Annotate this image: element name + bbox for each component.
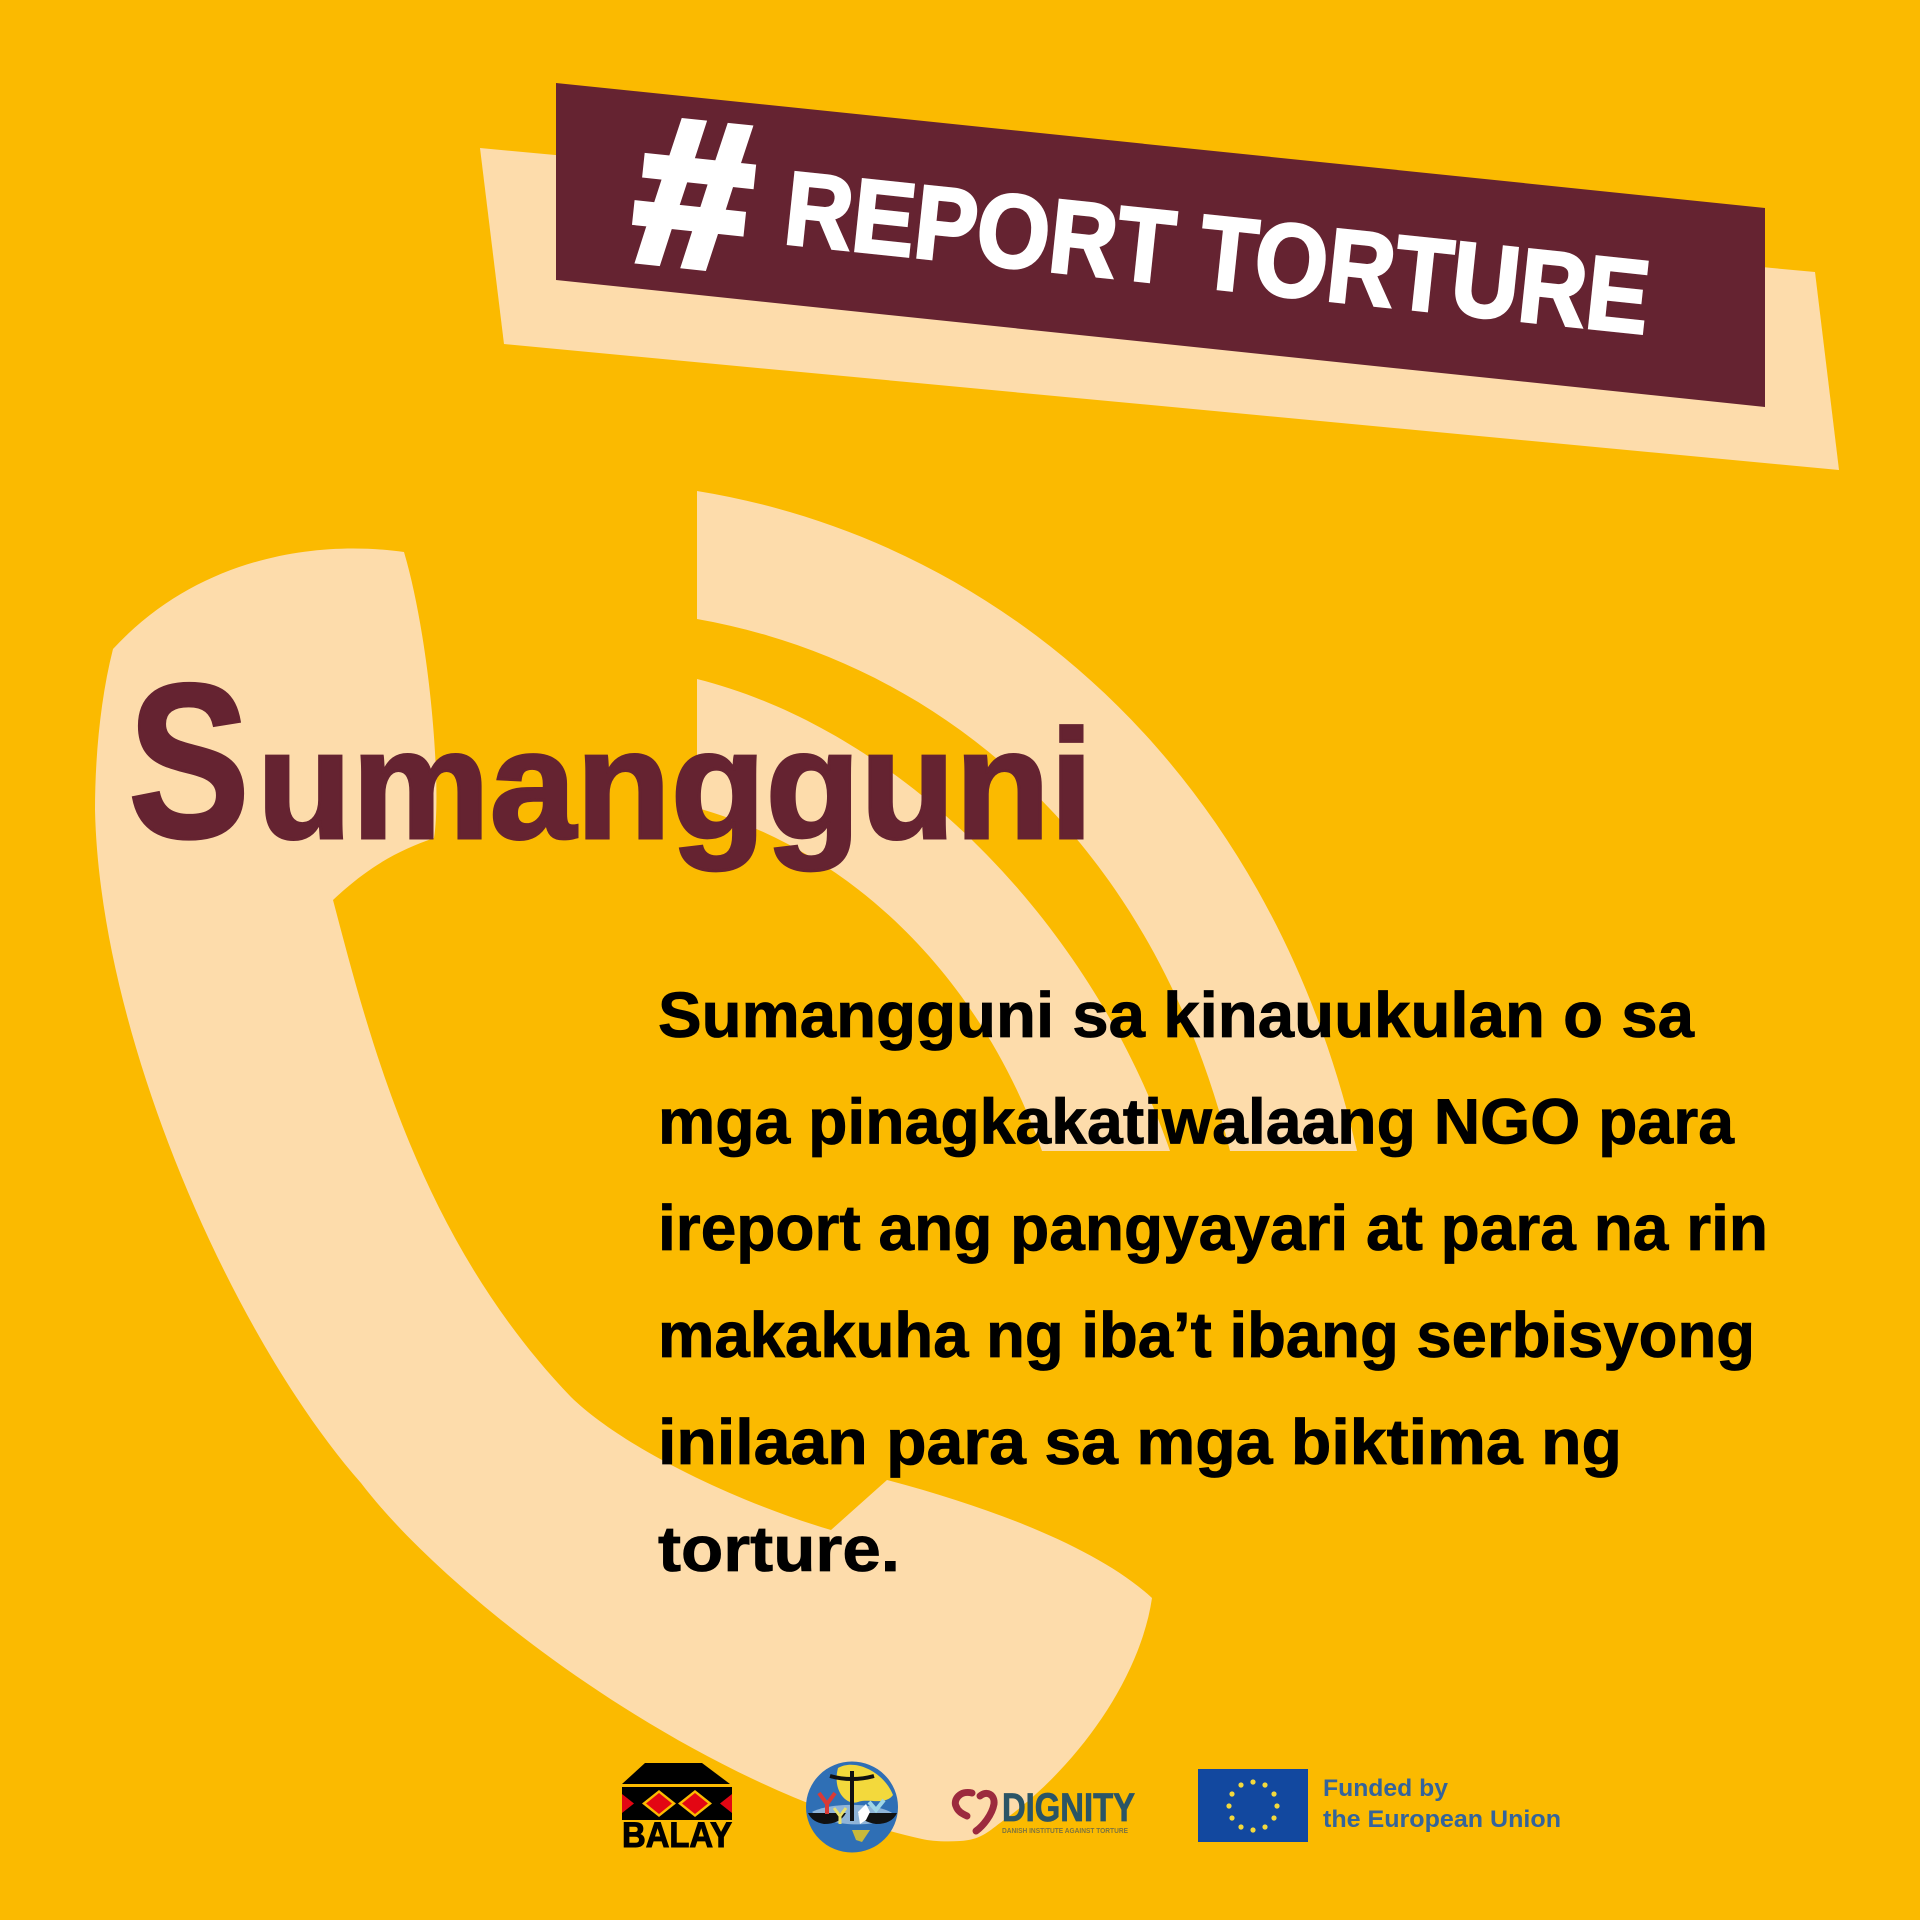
logo: Dignity	[955, 1786, 1135, 1835]
body text: Sumangguni sa kinauukulan o sa	[658, 979, 1694, 1051]
logo: Dignity: DANISH INSTITUTE AGAINST TORTURE	[1002, 1828, 1128, 1835]
hash symbol: #	[625, 74, 763, 314]
heading: S	[128, 638, 250, 884]
logo: EU flag	[1198, 1769, 1308, 1842]
heading: umangguni	[257, 698, 1093, 871]
icon: telephone handset	[95, 548, 1152, 1841]
body text: torture.	[658, 1513, 900, 1585]
logo: Balay: BALAY	[622, 1816, 732, 1855]
logo: Dignity: DIGNITY	[1002, 1786, 1135, 1830]
logo: globe with scales	[806, 1762, 898, 1852]
body text	[658, 979, 1768, 1585]
funding text: Funded by	[1323, 1775, 1449, 1802]
banner backing	[480, 148, 1839, 470]
funding text	[1323, 1775, 1561, 1833]
body text: ireport ang pangyayari at para na rin	[658, 1192, 1768, 1264]
icon: signal wave outer	[697, 491, 1357, 1151]
icon: signal wave inner	[697, 679, 1170, 1151]
body text: mga pinagkakatiwalaang NGO para	[658, 1086, 1734, 1158]
banner	[556, 83, 1765, 407]
body text: inilaan para sa mga biktima ng	[658, 1406, 1622, 1478]
body text: makakuha ng iba’t ibang serbisyong	[658, 1299, 1755, 1371]
banner title: REPORT TORTURE	[780, 151, 1655, 357]
funding text: the European Union	[1323, 1806, 1561, 1833]
heading	[128, 638, 1093, 884]
logo: Balay	[622, 1763, 732, 1855]
